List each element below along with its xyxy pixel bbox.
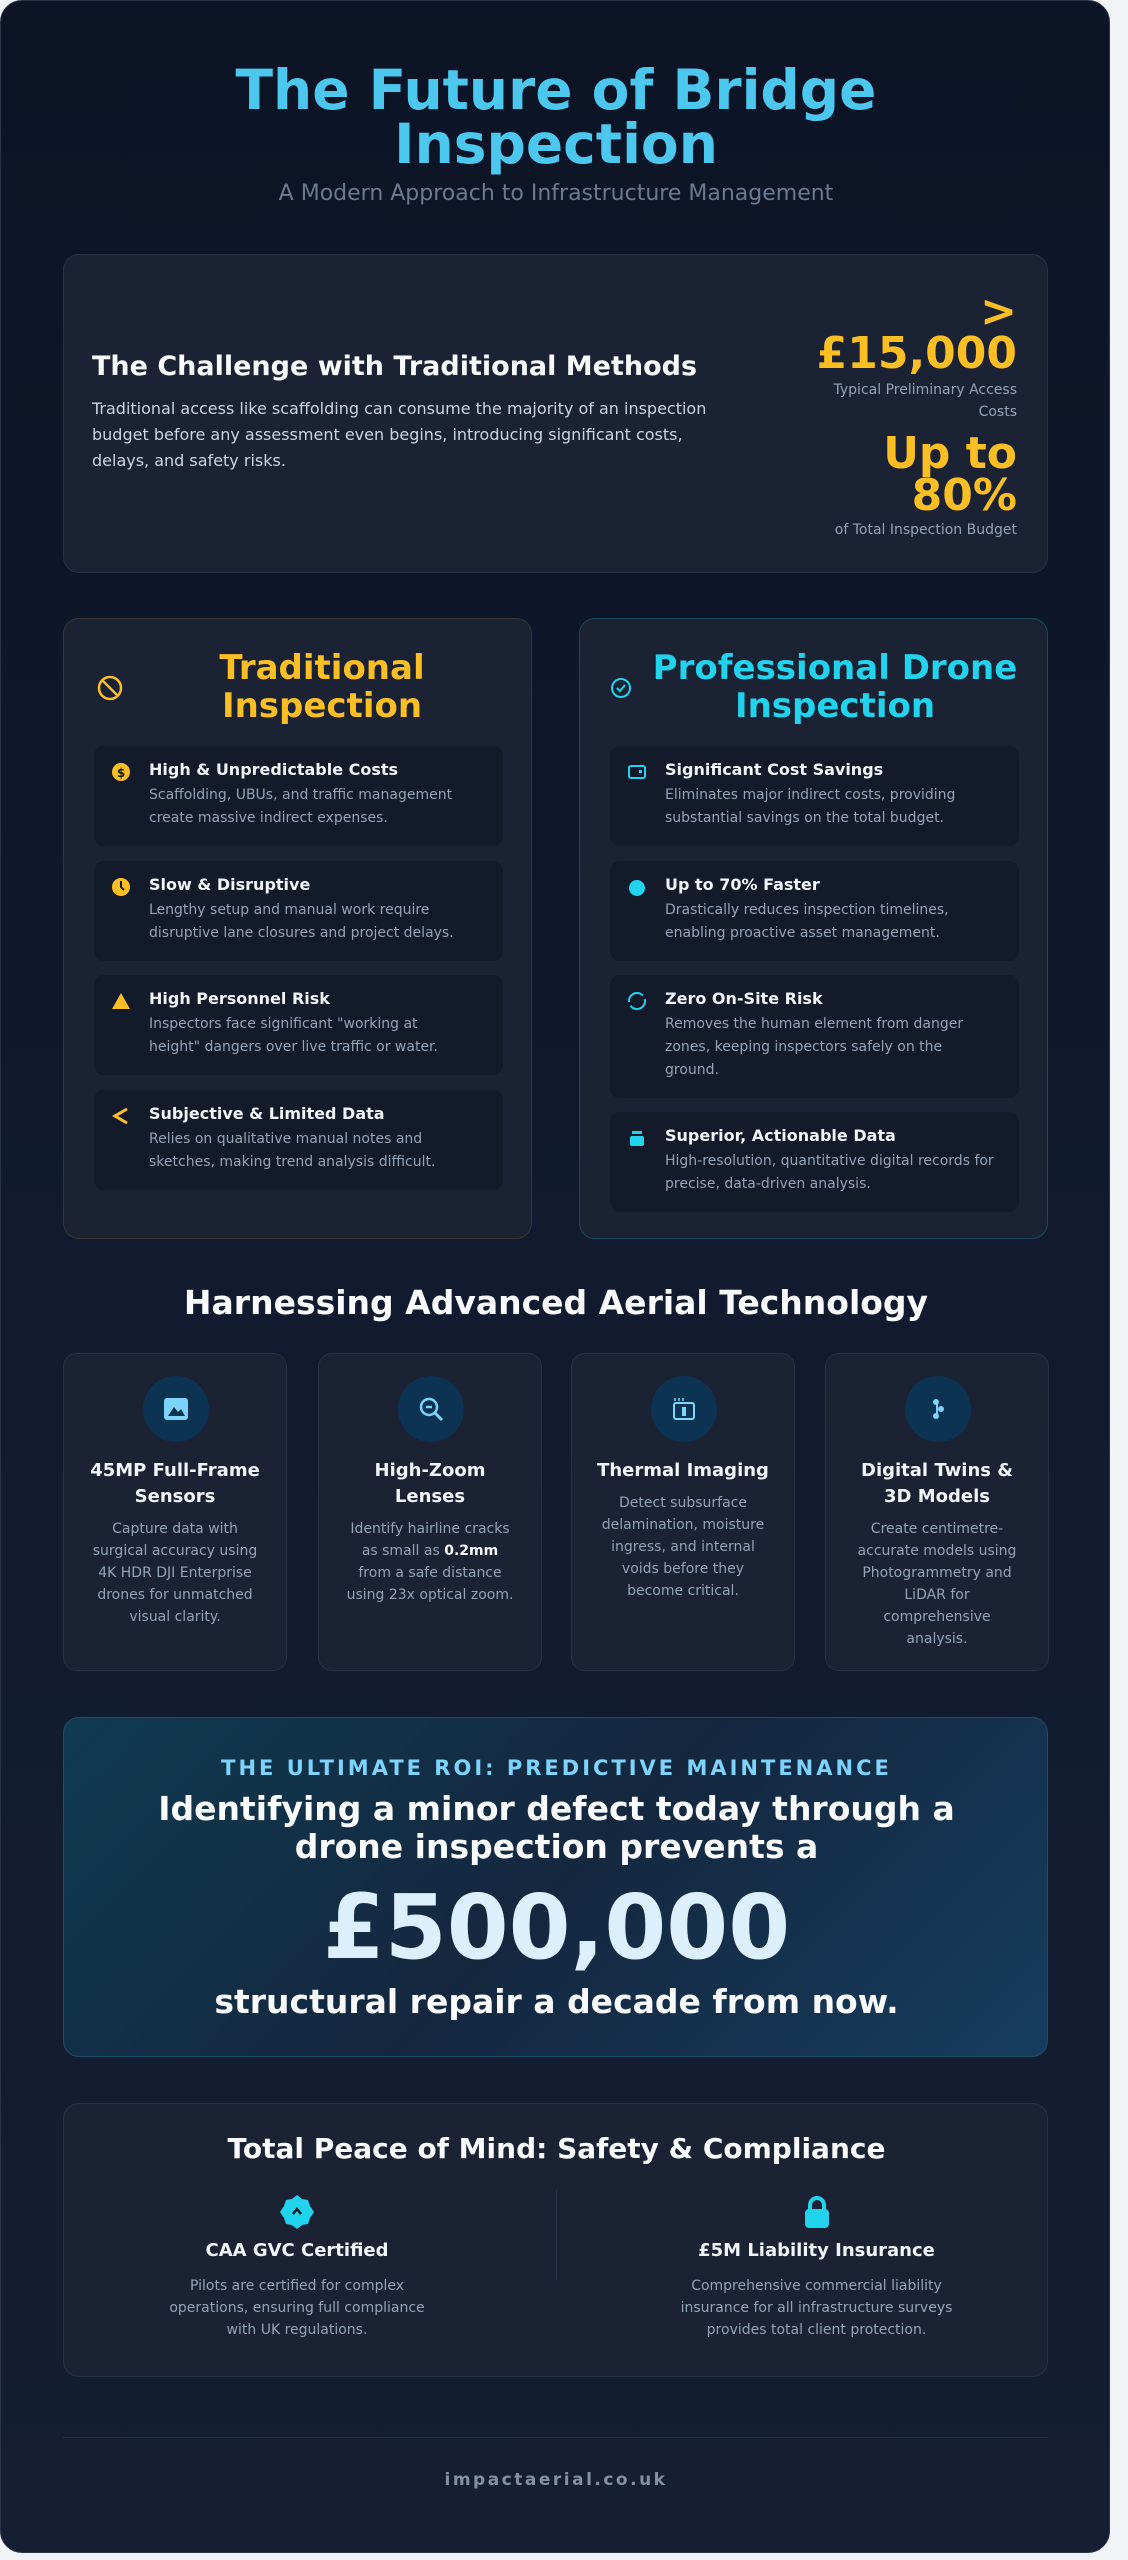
item: costs: High & Unpredictable Costs xyxy=(149,760,398,779)
card: thermal: become critical. xyxy=(627,1583,739,1599)
card: digital twins: comprehensive xyxy=(883,1609,991,1625)
ROI statement xyxy=(158,1789,955,1866)
safety item: insurance xyxy=(681,2196,952,2338)
item: slow: Slow & Disruptive xyxy=(149,875,310,894)
subtitle: A Modern Approach to Infrastructure Management xyxy=(279,181,833,206)
item: zero risk xyxy=(610,975,1019,1098)
heading: Inspection xyxy=(735,686,935,726)
icon: image xyxy=(143,1376,209,1442)
card: zoom: High-Zoom xyxy=(375,1460,485,1481)
panel: traditional inspection xyxy=(63,618,532,1239)
item: risk xyxy=(94,975,503,1075)
heading: Traditional xyxy=(219,648,425,688)
card: zoom: as small as 0.2mm xyxy=(362,1543,498,1559)
item: faster: Drastically reduces inspection timelines, enabling proactive asset management. xyxy=(665,902,949,941)
card: sensors: Capture data with surgical accuracy using 4K HDR DJI Enterprise drones for unmatched visual clarity. xyxy=(93,1521,257,1625)
title: The Future of Bridge xyxy=(236,58,876,122)
card: digital twins: 3D Models xyxy=(884,1486,990,1507)
ROI label: THE ULTIMATE ROI: PREDICTIVE MAINTENANCE xyxy=(221,1756,892,1780)
card: digital twins: Photogrammetry and xyxy=(862,1565,1012,1581)
icon: thermal xyxy=(651,1376,717,1442)
heading xyxy=(653,648,1017,726)
heading xyxy=(219,648,425,726)
item: risk: height" dangers over live traffic or water. xyxy=(149,1039,438,1055)
icon: check xyxy=(611,678,631,698)
icon: no sign xyxy=(98,676,122,700)
stats xyxy=(817,286,1017,538)
icon: magnifier xyxy=(398,1376,464,1442)
card: thermal xyxy=(571,1353,795,1671)
item: savings xyxy=(610,746,1019,846)
footer: impactaerial.co.uk xyxy=(444,2470,667,2490)
safety item: CAA xyxy=(169,2195,425,2338)
icon: drone xyxy=(905,1376,971,1442)
safety heading: Total Peace of Mind: Safety & Compliance xyxy=(228,2132,885,2165)
safety item: CAA: CAA GVC Certified xyxy=(205,2240,389,2261)
panel: drone inspection xyxy=(579,618,1048,1239)
item: data: Superior, Actionable Data xyxy=(665,1126,896,1145)
item: slow: Lengthy setup and manual work require disruptive lane closures and project delays. xyxy=(149,902,454,941)
heading: Professional Drone xyxy=(653,648,1017,688)
stats: of Total Inspection Budget xyxy=(835,522,1017,538)
ROI statement: Identifying a minor defect today through a xyxy=(158,1789,955,1828)
item: data: Relies on qualitative manual notes and sketches, making trend analysis difficult. xyxy=(149,1131,435,1170)
card: thermal: Detect subsurface xyxy=(619,1495,747,1511)
challenge text: delays, and safety risks. xyxy=(92,451,286,470)
card: zoom: Identify hairline cracks xyxy=(350,1521,510,1537)
item: costs: Scaffolding, UBUs, and traffic management create massive indirect expenses. xyxy=(149,787,452,826)
card: sensors: 45MP Full-Frame xyxy=(90,1460,260,1481)
ROI end: structural repair a decade from now. xyxy=(214,1982,899,2021)
card: digital twins: Digital Twins & xyxy=(861,1460,1013,1481)
item: slow xyxy=(94,861,503,961)
item: faster: Up to 70% Faster xyxy=(665,875,820,894)
card: thermal: delamination, moisture xyxy=(602,1517,764,1533)
card: zoom: from a safe distance xyxy=(358,1565,502,1581)
card: zoom: Lenses xyxy=(395,1486,465,1507)
item: faster xyxy=(610,861,1019,961)
panel: safety xyxy=(63,2103,1048,2377)
challenge text xyxy=(92,399,706,470)
challenge text: budget before any assessment even begins, introducing significant costs, xyxy=(92,425,683,444)
icon: badge xyxy=(280,2195,314,2229)
stats: > xyxy=(980,286,1017,337)
card: zoom: using 23x optical zoom. xyxy=(347,1587,513,1603)
card: sensors: Sensors xyxy=(135,1486,215,1507)
heading: Inspection xyxy=(222,686,422,726)
item: savings: Eliminates major indirect costs, providing substantial savings on the total budget. xyxy=(665,787,955,826)
title xyxy=(236,58,876,176)
safety item: insurance: Comprehensive commercial liability insurance for all infrastructure surveys provides total client protection. xyxy=(681,2278,952,2338)
card: digital twins: LiDAR for xyxy=(904,1587,970,1603)
panel: challenge xyxy=(63,254,1048,573)
ROI statement: drone inspection prevents a xyxy=(295,1827,818,1866)
big number: £500,000 xyxy=(323,1875,790,1979)
item: savings: Significant Cost Savings xyxy=(665,760,883,779)
item: data xyxy=(610,1112,1019,1212)
card: thermal: ingress, and internal xyxy=(611,1539,755,1555)
item: data xyxy=(94,1090,503,1190)
item: zero risk: Removes the human element from danger zones, keeping inspectors safely on the ground. xyxy=(665,1016,963,1078)
callout: ROI xyxy=(63,1717,1048,2057)
card: thermal: voids before they xyxy=(622,1561,744,1577)
challenge text: Traditional access like scaffolding can consume the majority of an inspection xyxy=(92,399,706,418)
item: risk: High Personnel Risk xyxy=(149,989,330,1008)
card: thermal: Thermal Imaging xyxy=(597,1460,769,1481)
item: zero risk: Zero On-Site Risk xyxy=(665,989,823,1008)
card: sensors xyxy=(63,1353,287,1671)
card: digital twins xyxy=(825,1353,1049,1671)
stats: Up to xyxy=(883,428,1017,479)
safety item: insurance: £5M Liability Insurance xyxy=(698,2240,935,2261)
stats: 80% xyxy=(912,470,1017,521)
safety item: CAA: Pilots are certified for complex operations, ensuring full compliance with UK regulations. xyxy=(169,2278,425,2338)
card: digital twins: Create centimetre- xyxy=(871,1521,1003,1537)
stats: Typical Preliminary Access Costs xyxy=(834,382,1017,420)
item: risk: Inspectors face significant "working at xyxy=(149,1016,418,1032)
section heading: technology: Harnessing Advanced Aerial Technology xyxy=(184,1283,928,1322)
icon: lock xyxy=(805,2196,829,2228)
item: costs: $ xyxy=(117,766,125,780)
item: data: Subjective & Limited Data xyxy=(149,1104,385,1123)
card: zoom xyxy=(318,1353,542,1671)
item: data: High-resolution, quantitative digital records for precise, data-driven analysis. xyxy=(665,1153,994,1192)
item: costs xyxy=(94,746,503,846)
stats: £15,000 xyxy=(817,328,1017,379)
card: digital twins: analysis. xyxy=(906,1631,968,1647)
title: Inspection xyxy=(394,112,718,176)
card: digital twins: accurate models using xyxy=(858,1543,1016,1559)
challenge heading: The Challenge with Traditional Methods xyxy=(92,351,697,382)
